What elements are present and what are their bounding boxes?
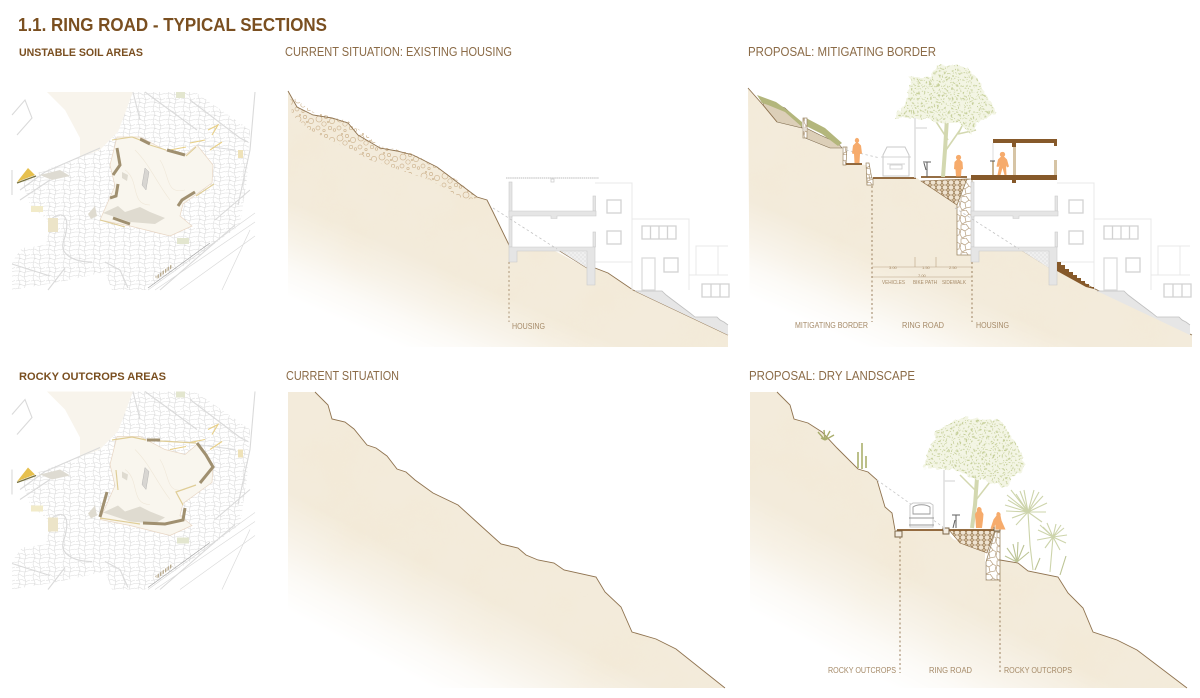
planted soil terraces xyxy=(757,95,842,148)
heading: rocky outcrops areas: ROCKY OUTCROPS AREAS xyxy=(19,371,166,383)
ground line xyxy=(315,392,725,688)
dimension lines: 2.50 xyxy=(949,265,958,270)
road surface xyxy=(873,177,967,178)
person on path xyxy=(852,138,862,163)
title: 1.1. RING ROAD - TYPICAL SECTIONS xyxy=(18,14,327,35)
ground line xyxy=(288,91,728,335)
heading: current situation: CURRENT SITUATION xyxy=(286,369,399,383)
retaining stones xyxy=(803,118,873,185)
label: rocky outcrops left: ROCKY OUTCROPS xyxy=(828,666,896,675)
shrub xyxy=(1005,542,1066,575)
map: unstable soil areas xyxy=(12,92,255,290)
heading: proposal dry landscape: PROPOSAL: DRY LANDSCAPE xyxy=(749,369,915,383)
label: ring road: RING ROAD xyxy=(929,666,972,675)
dashed markers xyxy=(900,537,1000,673)
dimension lines: 7.00 xyxy=(918,273,927,278)
ground line xyxy=(748,88,1192,335)
brown stairs xyxy=(1057,262,1094,289)
bicycle xyxy=(923,162,931,177)
vehicle xyxy=(909,503,934,527)
panel: current situation existing housing section xyxy=(288,91,729,347)
street lamp xyxy=(944,470,955,530)
person on sidewalk xyxy=(954,155,963,176)
tree xyxy=(895,65,996,177)
person on terrace xyxy=(996,152,1009,175)
terrain xyxy=(750,392,1187,688)
cactus xyxy=(858,443,866,469)
dimension lines xyxy=(872,257,972,278)
label: housing: HOUSING xyxy=(512,322,545,331)
person seated xyxy=(990,512,1006,530)
rubble band xyxy=(290,95,477,200)
label: ring road: RING ROAD xyxy=(902,321,944,330)
dimension lines: 3.00 xyxy=(889,265,898,270)
street lamp xyxy=(915,118,927,178)
stone retaining wall xyxy=(986,532,1000,580)
panel: proposal mitigating border section xyxy=(748,65,1192,347)
map: rocky outcrops areas xyxy=(12,392,255,590)
housing section xyxy=(955,182,1191,335)
label: vehicles: VEHICLES xyxy=(882,280,905,286)
housing section xyxy=(493,178,729,335)
heading: current situation existing housing: CURRENT SITUATION: EXISTING HOUSING xyxy=(285,45,512,59)
dashed markers xyxy=(872,186,972,322)
bicycle xyxy=(952,515,960,528)
terrain xyxy=(288,91,728,347)
road surface xyxy=(897,529,995,531)
panel: current situation rocky slope xyxy=(288,392,725,688)
ground line xyxy=(777,392,1187,688)
label: rocky outcrops right: ROCKY OUTCROPS xyxy=(1004,666,1072,675)
dashed sight line xyxy=(846,150,880,158)
dimension lines: 1.50 xyxy=(922,265,931,270)
heading: unstable soil areas: UNSTABLE SOIL AREAS xyxy=(19,47,143,59)
label: housing: HOUSING xyxy=(976,321,1009,330)
kerb blocks xyxy=(895,524,1000,537)
label: bike path: BIKE PATH xyxy=(913,280,937,286)
dashed sight line xyxy=(877,480,943,527)
label: mitigating border: MITIGATING BORDER xyxy=(795,321,868,330)
terrain xyxy=(748,88,1192,347)
panel: proposal dry landscape section xyxy=(750,392,1187,688)
dashed marker: housing xyxy=(508,262,510,322)
agave on slope xyxy=(818,430,834,440)
tree xyxy=(923,418,1025,528)
van xyxy=(881,147,911,176)
person standing xyxy=(975,507,984,528)
heading: proposal mitigating border: PROPOSAL: MITIGATING BORDER xyxy=(748,45,936,59)
terrain xyxy=(288,392,725,688)
stone retaining wall xyxy=(957,179,972,255)
palm large xyxy=(1005,490,1047,570)
gabion fill xyxy=(949,530,995,553)
label: sidewalk: SIDEWALK xyxy=(942,280,966,286)
palm small xyxy=(1037,523,1067,572)
rooftop pavilion xyxy=(971,139,1057,183)
gabion fill xyxy=(921,179,967,205)
